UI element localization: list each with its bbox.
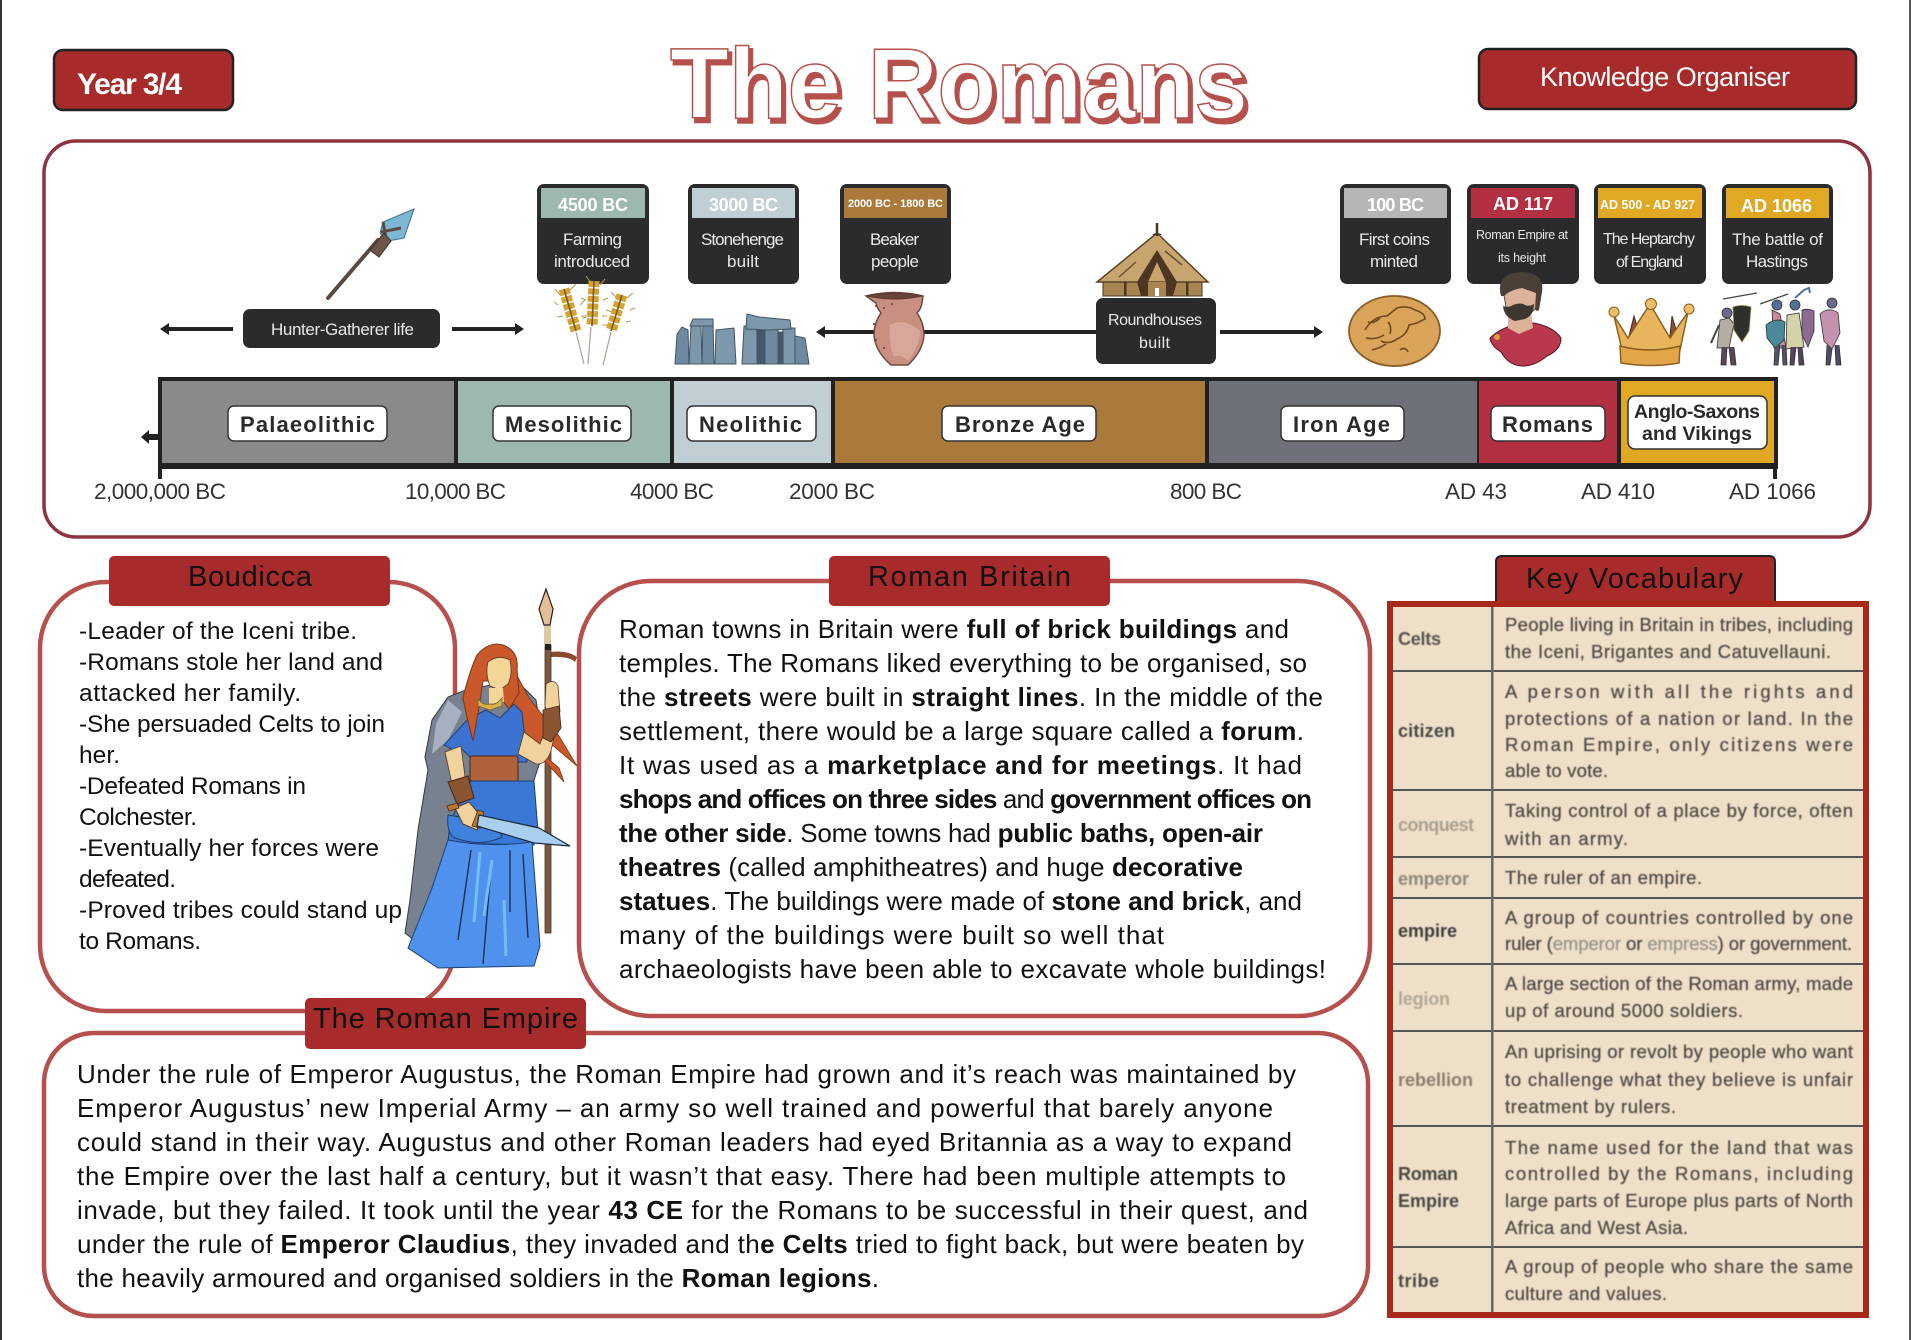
- event card: 4500 BC Farming introduced: introduced: [554, 252, 630, 271]
- text: Boudicca facts: to Romans.: [79, 928, 201, 955]
- event card: 2000 BC - 1800 BC Beaker people: [840, 184, 951, 284]
- label: Iron Age: Iron Age: [1293, 412, 1390, 437]
- text: Roman Britain paragraph: archaeologists have been able to excavate whole buildings!: [619, 954, 1326, 984]
- event card: 3000 BC Stonehenge built: 3000 BC: [709, 195, 778, 215]
- event card: 2000 BC - 1800 BC Beaker people: 2000 BC - 1800 BC: [848, 198, 943, 210]
- event card: 2000 BC - 1800 BC Beaker people: Beaker: [870, 230, 919, 249]
- icon: wheat: [554, 276, 635, 365]
- text: Boudicca facts: attacked her family.: [79, 680, 301, 707]
- heading: Roman Britain: [829, 556, 1110, 606]
- text: Boudicca facts: -Proved tribes could stand up: [79, 897, 402, 924]
- table: vocabulary: empire: [1398, 921, 1457, 941]
- text: Roman Empire paragraph: [77, 1059, 1308, 1293]
- heading: The Roman Empire: [305, 998, 586, 1049]
- label: Romans: [1491, 406, 1605, 441]
- heading: Boudicca: [109, 556, 390, 606]
- table: vocabulary: An uprising or revolt by people who want: [1505, 1041, 1853, 1062]
- table: vocabulary: citizen: [1398, 721, 1455, 741]
- table: vocabulary: controlled by the Romans, including: [1505, 1163, 1853, 1184]
- text: Boudicca facts: -She persuaded Celts to join: [79, 711, 385, 738]
- date axis labels: 4000 BC: [630, 479, 714, 504]
- label: Anglo-Saxons and Vikings: Anglo-Saxons: [1634, 401, 1760, 423]
- label: Palaeolithic: [228, 406, 387, 441]
- panel: Key Vocabulary: [1390, 556, 1866, 1315]
- heading: Boudicca: Boudicca: [188, 561, 313, 593]
- event card: 100 BC First coins minted: [1340, 184, 1451, 284]
- date axis labels: AD 1066: [1729, 479, 1816, 504]
- event card: AD 1066 The battle of Hastings: AD 1066: [1741, 196, 1812, 216]
- date axis labels: 10,000 BC: [405, 479, 506, 504]
- timeline bar: [141, 377, 1778, 479]
- table: vocabulary: The ruler of an empire.: [1505, 867, 1702, 888]
- long hair right: [508, 670, 577, 782]
- text: Roman Britain paragraph: settlement, there would be a large square called a forum.: [619, 716, 1304, 746]
- table: vocabulary: rebellion: [1398, 1070, 1473, 1090]
- text: Roman Empire paragraph: Under the rule of Emperor Augustus, the Roman Empire had grown and it’s reach was maintained by: [77, 1059, 1296, 1089]
- event card: 4500 BC Farming introduced: Farming: [563, 230, 622, 249]
- panel: The Roman Empire: [44, 998, 1368, 1316]
- icon: Beaker pot: [866, 292, 924, 365]
- text: Boudicca facts: her.: [79, 742, 120, 769]
- table: vocabulary: Celts: [1398, 629, 1441, 649]
- event card: AD 1066 The battle of Hastings: [1722, 184, 1833, 284]
- text: Boudicca facts: -Defeated Romans in: [79, 773, 306, 800]
- table: vocabulary: Roman: [1398, 1164, 1458, 1184]
- panel: Roman Britain: [579, 556, 1370, 1016]
- table: vocabulary: Roman Empire, only citizens were: [1505, 734, 1853, 755]
- event card: 4500 BC Farming introduced: [537, 184, 649, 284]
- title: The Romans: [673, 32, 1251, 144]
- text: Roman Britain paragraph: Roman towns in Britain were full of brick buildings and: [619, 614, 1289, 644]
- text: Roman Empire paragraph: the heavily armoured and organised soldiers in the Roman legions.: [77, 1263, 879, 1293]
- spear: [539, 589, 577, 933]
- date axis labels: AD 410: [1581, 479, 1655, 504]
- table: vocabulary: A large section of the Roman army, made: [1505, 973, 1853, 994]
- icon: stone spear: [328, 209, 414, 298]
- label: Neolithic: Neolithic: [699, 412, 802, 437]
- panel: timeline: [44, 141, 1870, 537]
- badge: Year 3/4: Year 3/4: [77, 68, 182, 101]
- text: Roman Empire paragraph: invade, but they failed. It took until the year 43 CE for the Romans to be successful in their quest, and: [77, 1195, 1308, 1225]
- table: vocabulary: A group of people who share the same: [1505, 1256, 1853, 1277]
- dress bodice: [444, 704, 527, 762]
- text: Boudicca facts: -Leader of the Iceni tribe.: [79, 618, 357, 645]
- date axis labels: 2000 BC: [789, 479, 875, 504]
- text: Boudicca facts: -Eventually her forces were: [79, 835, 379, 862]
- label: Roundhouses built: Roundhouses: [1108, 312, 1202, 329]
- text: Roman Britain paragraph: [619, 614, 1326, 984]
- table: vocabulary: emperor: [1398, 869, 1469, 889]
- badge: Knowledge Organiser: Knowledge Organiser: [1540, 62, 1790, 92]
- event card: AD 500 - AD 927 The Heptarchy of England: The Heptarchy: [1603, 231, 1695, 248]
- text: Roman Britain paragraph: theatres (called amphitheatres) and huge decorative: [619, 852, 1243, 882]
- table: vocabulary: with an army.: [1504, 828, 1628, 849]
- text: Roman Empire paragraph: the Empire over the last half a century, but it wasn’t that easy. There had been multiple attempts to: [77, 1161, 1286, 1191]
- event card: AD 117 Roman Empire at its height: AD 117: [1493, 194, 1553, 214]
- label: Neolithic: [687, 406, 816, 441]
- cloak: [405, 680, 544, 940]
- heading: Key Vocabulary: Key Vocabulary: [1526, 563, 1744, 595]
- text: Boudicca facts: -Romans stole her land and: [79, 649, 383, 676]
- label: Bronze Age: [942, 406, 1096, 441]
- title: The Romans: [670, 28, 1248, 140]
- label: Iron Age: [1281, 406, 1404, 441]
- text: Roman Empire paragraph: could stand in their way. Augustus and other Roman leaders had eyed Britannia as a way to expand: [77, 1127, 1292, 1157]
- event card: AD 500 - AD 927 The Heptarchy of England: AD 500 - AD 927: [1600, 198, 1695, 212]
- table: vocabulary: protections of a nation or land. In the: [1505, 708, 1853, 729]
- arrow: Roundhouses forward: [1220, 326, 1323, 338]
- icon: Roman emperor bust: [1490, 272, 1561, 366]
- table: vocabulary: Taking control of a place by force, often: [1505, 800, 1853, 821]
- panel: Boudicca: [40, 556, 455, 1011]
- event card: AD 117 Roman Empire at its height: its height: [1498, 251, 1547, 265]
- label: Hunter-Gatherer life with arrows: Hunter-Gatherer life: [271, 320, 414, 339]
- event card: AD 500 - AD 927 The Heptarchy of England: [1594, 184, 1706, 284]
- event card: 3000 BC Stonehenge built: [688, 184, 799, 284]
- table: vocabulary: A group of countries controlled by one: [1505, 907, 1853, 928]
- label: Mesolithic: [493, 406, 631, 441]
- icon: Stonehenge: [675, 314, 809, 364]
- tunic and skirt: [448, 781, 538, 845]
- table: vocabulary: tribe: [1398, 1271, 1439, 1291]
- event card: 2000 BC - 1800 BC Beaker people: people: [871, 252, 919, 271]
- event card: 100 BC First coins minted: First coins: [1359, 230, 1430, 249]
- label: Roundhouses built: built: [1139, 335, 1171, 352]
- event card: AD 1066 The battle of Hastings: The battle of: [1732, 230, 1823, 249]
- table: vocabulary: The name used for the land that was: [1505, 1137, 1853, 1158]
- date axis labels: 2,000,000 BC: [94, 479, 226, 504]
- icon: crown: [1609, 298, 1694, 366]
- text: Roman Empire paragraph: Emperor Augustus’ new Imperial Army – an army so well trained and powerful that barely anyone: [77, 1093, 1273, 1123]
- text: Roman Britain paragraph: the other side. Some towns had public baths, open-air: [619, 818, 1263, 848]
- heading: The Roman Empire: The Roman Empire: [313, 1003, 578, 1035]
- hair and face: [463, 644, 519, 741]
- icon: gold coin: [1349, 296, 1440, 366]
- event card: AD 1066 The battle of Hastings: Hastings: [1746, 252, 1808, 271]
- table: vocabulary: legion: [1398, 989, 1450, 1009]
- belt: [470, 756, 518, 781]
- bracer and hand: [448, 776, 474, 804]
- event card: AD 117 Roman Empire at its height: [1467, 184, 1579, 284]
- arms: [518, 714, 558, 764]
- table: vocabulary: to challenge what they believe is unfair: [1505, 1069, 1853, 1090]
- label: Roundhouses built: [1096, 298, 1216, 364]
- event card: 3000 BC Stonehenge built: Stonehenge: [701, 230, 784, 249]
- label: Hunter-Gatherer life with arrows: [160, 309, 524, 348]
- sword: [477, 815, 570, 846]
- text: Roman Britain paragraph: the streets were built in straight lines. In the middle of the: [619, 682, 1323, 712]
- table: vocabulary: able to vote.: [1505, 760, 1608, 781]
- text: Boudicca facts: [79, 618, 402, 955]
- heading: Roman Britain: Roman Britain: [868, 561, 1071, 593]
- table: vocabulary: [1390, 604, 1866, 1315]
- badge: Knowledge Organiser: [1479, 49, 1856, 109]
- badge: Year 3/4: [54, 50, 233, 110]
- icon: battle soldiers: [1711, 288, 1841, 365]
- table: vocabulary: People living in Britain in tribes, including: [1505, 614, 1853, 635]
- heading: Key Vocabulary: [1496, 556, 1775, 602]
- label: Mesolithic: Mesolithic: [505, 412, 622, 437]
- table: vocabulary: A person with all the rights and: [1505, 681, 1853, 702]
- text: Roman Britain paragraph: statues. The buildings were made of stone and brick, and: [619, 886, 1302, 916]
- illustration: Boudicca figure: [405, 589, 577, 968]
- table: vocabulary: Africa and West Asia.: [1505, 1217, 1688, 1238]
- event card: 100 BC First coins minted: 100 BC: [1367, 195, 1424, 215]
- label: Bronze Age: Bronze Age: [955, 412, 1085, 437]
- event card: AD 500 - AD 927 The Heptarchy of England: of England: [1616, 254, 1683, 271]
- icon: roundhouse: [1097, 223, 1208, 296]
- table: vocabulary: the Iceni, Brigantes and Catuvellauni.: [1505, 641, 1831, 662]
- table: vocabulary: culture and values.: [1505, 1283, 1667, 1304]
- text: Boudicca facts: defeated.: [79, 866, 176, 893]
- arrow: Beaker people to Roundhouses: [816, 326, 1096, 338]
- table: vocabulary: up of around 5000 soldiers.: [1505, 1000, 1743, 1021]
- date axis labels: [94, 479, 1816, 504]
- label: Romans: Romans: [1502, 412, 1593, 437]
- text: Roman Britain paragraph: temples. The Romans liked everything to be organised, so: [619, 648, 1307, 678]
- event card: 100 BC First coins minted: minted: [1370, 252, 1418, 271]
- label: Anglo-Saxons and Vikings: and Vikings: [1642, 423, 1752, 445]
- table: vocabulary: treatment by rulers.: [1505, 1096, 1676, 1117]
- label: Palaeolithic: Palaeolithic: [240, 412, 375, 437]
- event card: 3000 BC Stonehenge built: built: [727, 252, 759, 271]
- table: vocabulary: conquest: [1398, 815, 1474, 835]
- text: Roman Empire paragraph: under the rule of Emperor Claudius, they invaded and the Celts tried to fight back, but were beaten by: [77, 1229, 1304, 1259]
- text: Boudicca facts: Colchester.: [79, 804, 197, 831]
- text: Roman Britain paragraph: It was used as a marketplace and for meetings. It had: [619, 750, 1302, 780]
- text: Roman Britain paragraph: many of the buildings were built so well that: [619, 920, 1165, 950]
- text: Roman Britain paragraph: shops and offices on three sides and government offices on: [619, 784, 1312, 814]
- table: vocabulary: large parts of Europe plus parts of North: [1505, 1190, 1853, 1211]
- date axis labels: AD 43: [1445, 479, 1507, 504]
- event card: 4500 BC Farming introduced: 4500 BC: [558, 195, 628, 215]
- event card: AD 117 Roman Empire at its height: Roman Empire at: [1476, 228, 1569, 242]
- date axis labels: 800 BC: [1170, 479, 1242, 504]
- label: Anglo-Saxons and Vikings: [1628, 396, 1767, 449]
- table: vocabulary: Empire: [1398, 1191, 1459, 1211]
- table: vocabulary: ruler (emperor or empress) or government.: [1505, 933, 1852, 954]
